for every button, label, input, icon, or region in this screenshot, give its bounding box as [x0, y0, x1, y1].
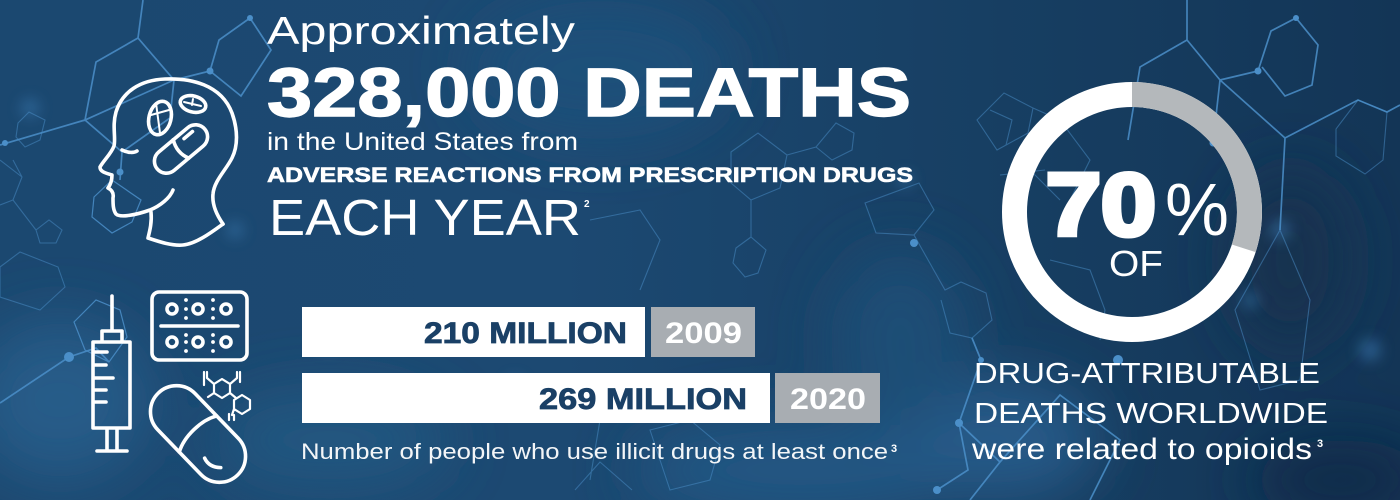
bar: 2009: 2009	[665, 317, 742, 350]
percent sign: %	[1165, 168, 1229, 251]
donut chart: 70 percent	[1014, 94, 1250, 330]
icon: large capsule	[140, 375, 256, 493]
text: drug-attributable deaths: DRUG-ATTRIBUTABLE	[974, 358, 1320, 390]
bar: 2009: 210 MILLION	[424, 317, 627, 350]
text: drug-attributable deaths	[971, 358, 1328, 466]
bar chart caption: Number of people who use illicit drugs at least once	[301, 439, 888, 464]
bar: 2009	[302, 307, 755, 357]
icon: syringe	[93, 296, 130, 451]
icon: head with pills	[100, 79, 236, 245]
text: drug-attributable deaths: were related to opioids	[971, 433, 1312, 466]
donut value: 70	[1046, 155, 1156, 254]
footnote marker 3: 3	[891, 443, 897, 455]
text: each year: EACH YEAR	[269, 189, 581, 246]
bar: 2020: 269 MILLION	[539, 383, 747, 416]
text: of: OF	[1109, 243, 1163, 284]
footnote marker 2: 2	[584, 199, 590, 210]
icon: molecule	[204, 372, 250, 420]
heading: 328,000 deaths: 328,000 DEATHS	[267, 54, 911, 131]
tablet: round right	[178, 93, 208, 115]
bar: 2020: 2020	[790, 383, 866, 416]
text: drug-attributable deaths: DEATHS WORLDWIDE	[974, 398, 1328, 430]
text: drug-attributable deaths: 3	[1317, 438, 1323, 450]
text: adverse reactions: ADVERSE REACTIONS FROM PRESCRIPTION DRUGS	[267, 164, 913, 187]
bar: 2020	[302, 373, 880, 423]
heading: approximately: Approximately	[267, 10, 576, 53]
capsule in head	[150, 120, 212, 178]
tablet: round left	[145, 99, 175, 137]
icon: blister pack	[152, 292, 247, 360]
text: in the United States from: in the United States from	[267, 128, 578, 156]
